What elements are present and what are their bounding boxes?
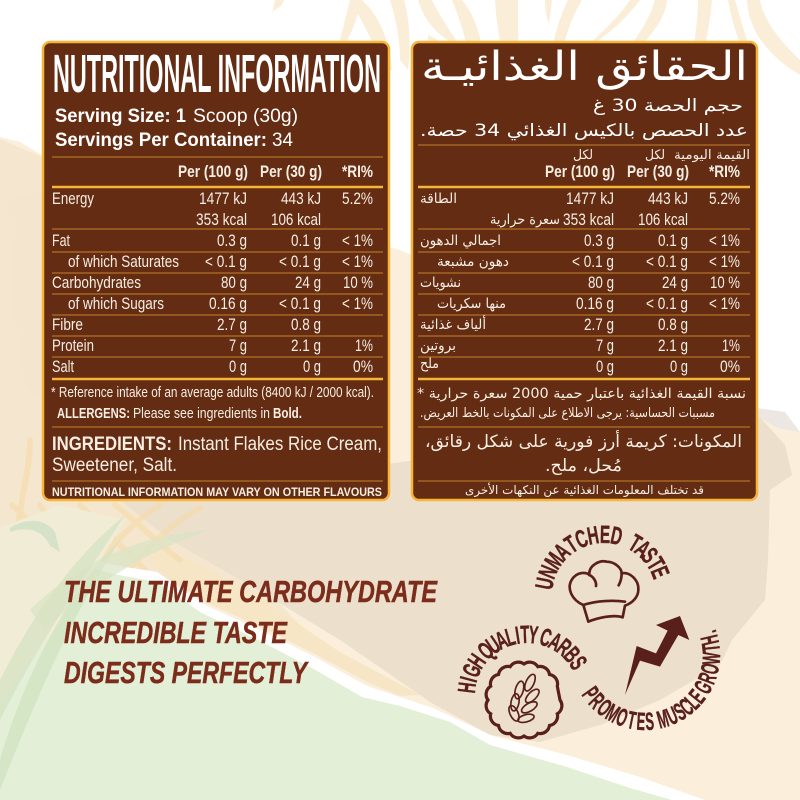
arabic row labels: بروتين (420, 338, 456, 354)
arabic serving size (420, 96, 748, 141)
promotes muscle growth curved label: S (669, 698, 691, 727)
table rows: 2.1 g (291, 336, 321, 355)
high quality carbs curved label: H (454, 681, 482, 695)
arabic serving size: حجم الحصة 30 غ (593, 96, 743, 116)
unmatched taste curved label: M (540, 548, 570, 574)
arabic ingredients (425, 430, 742, 476)
badge: unmatched taste (531, 521, 674, 622)
serving size: 34 (272, 130, 293, 151)
ingredients: INGREDIENTS: (52, 434, 172, 455)
promotes muscle growth curved label: . (695, 627, 722, 639)
left wood streak (8, 190, 42, 400)
table rows: of which Saturates (68, 252, 179, 271)
arabic row labels: الطاقة (420, 191, 457, 207)
table header: Per (100 g) (545, 162, 615, 181)
wood brush strokes (120, 414, 792, 742)
arabic row labels: سعرة حرارية (490, 212, 560, 228)
slogans: DIGESTS PERFECTLY (64, 655, 309, 690)
arabic footer note: قد تختلف المعلومات الغذائية عن النكهات الأخرى (465, 482, 704, 498)
text: NUTRITIONAL INFORMATION (53, 44, 381, 104)
table rows: 0.3 g (217, 231, 247, 250)
table rows values: 0 g (596, 357, 614, 376)
table header: *RI% (342, 162, 373, 181)
table header: *RI% (709, 162, 740, 181)
high quality carbs curved label: I (456, 674, 483, 685)
table rows: 106 kcal (271, 210, 321, 229)
grey tear shadow (757, 408, 800, 432)
table rows: 5.2% (342, 189, 373, 208)
table rows values: 10 % (710, 273, 740, 292)
table rows values: 24 g (662, 273, 688, 292)
table rows values: 1% (722, 336, 740, 355)
promotes muscle growth curved label: O (612, 704, 631, 733)
white tear band (0, 536, 705, 800)
table header: لكل (645, 148, 665, 163)
table rows values: 443 kJ (648, 189, 688, 208)
badge: promotes muscle growth (576, 616, 726, 736)
promotes muscle growth curved label: T (625, 707, 638, 735)
ingredients: Sweetener, Salt. (52, 455, 177, 476)
arabic ingredients: مُحل، ملح. (545, 456, 622, 476)
table rows values: 0.16 g (576, 294, 614, 313)
icon: chef hat (570, 561, 638, 622)
slogans (64, 574, 438, 690)
high quality carbs curved label: L (503, 624, 519, 652)
high quality carbs curved label: S (563, 652, 591, 675)
unmatched taste curved label: E (600, 521, 611, 549)
table rows: 2.7 g (217, 315, 247, 334)
high quality carbs curved label: G (458, 660, 487, 681)
unmatched taste curved label: A (629, 535, 656, 563)
arabic serving size: عدد الحصص بالكيس الغذائي 34 حصة. (420, 121, 748, 141)
high quality carbs curved label: Q (473, 638, 500, 665)
unmatched taste curved label: N (534, 562, 564, 583)
promotes muscle growth curved label: C (675, 694, 699, 722)
table rows values: < 0.1 g (572, 252, 614, 271)
badge: high quality carbs (454, 622, 591, 738)
table rows values: 7 g (596, 336, 614, 355)
table rows: 7 g (229, 336, 247, 355)
table rows values: 1477 kJ (566, 189, 614, 208)
unmatched taste curved label: A (549, 538, 576, 566)
table header (545, 148, 750, 181)
table rows values: 5.2% (709, 189, 740, 208)
table rows values: < 1% (709, 231, 740, 250)
table rows: Energy (52, 189, 94, 208)
table rows: 353 kcal (196, 210, 247, 229)
promotes muscle growth curved label: H (696, 632, 725, 648)
high quality carbs curved label: Y (527, 622, 540, 650)
unmatched taste curved label: T (641, 553, 670, 576)
promotes muscle growth curved label: G (689, 677, 719, 699)
allergens (57, 405, 302, 422)
arabic row labels: نشويات (420, 275, 461, 291)
arabic title: الحقائق الغذائيـة (421, 44, 748, 90)
slogans: THE ULTIMATE CARBOHYDRATE (64, 574, 438, 609)
table rows: 0.8 g (291, 315, 321, 334)
icon: wheat (507, 673, 541, 724)
rice stalks orange (12, 440, 200, 640)
high quality carbs curved label: T (520, 622, 530, 649)
high quality carbs curved label: R (551, 634, 576, 662)
promotes muscle growth curved label: P (576, 682, 604, 705)
allergens: ALLERGENS: (57, 405, 130, 422)
table header: Per (30 g) (260, 162, 322, 181)
table rows values (563, 189, 740, 376)
arabic row labels: اجمالي الدهون (420, 233, 501, 249)
high quality carbs curved label: A (544, 628, 566, 657)
promotes muscle growth curved label: S (644, 708, 655, 736)
unmatched taste curved label: C (571, 525, 592, 554)
table header: لكل (573, 148, 593, 163)
footer note: NUTRITIONAL INFORMATION MAY VARY ON OTHER FLAVOURS (52, 487, 382, 499)
unmatched taste curved label: U (531, 575, 560, 592)
high quality carbs curved label (454, 622, 591, 695)
ingredients (52, 434, 382, 476)
icon: scalloped ring (486, 662, 562, 738)
panel: nutritional information arabic (412, 42, 757, 500)
unmatched taste curved label: T (560, 531, 583, 559)
table rows: < 1% (342, 252, 373, 271)
table rows: of which Sugars (68, 294, 164, 313)
high quality carbs curved label: C (536, 624, 555, 653)
unmatched taste curved label (531, 521, 674, 592)
unmatched taste curved label: H (585, 522, 601, 551)
table rules (52, 157, 383, 481)
table rows: < 1% (342, 294, 373, 313)
promotes muscle growth curved label: O (696, 661, 726, 677)
green area (0, 528, 672, 800)
arabic row labels: دهون مشبعة (437, 254, 509, 270)
table rows: 1% (355, 336, 373, 355)
arabic allergens: مسببات الحساسية: يرجى الاطلاع على المكونات بالخط العريض. (420, 406, 715, 421)
top rice leaves (272, 0, 800, 75)
ingredients: Instant Flakes Rice Cream, (178, 434, 382, 455)
table rows values: 0.8 g (658, 315, 688, 334)
high quality carbs curved label: H (464, 650, 492, 674)
table rows: 10 % (343, 273, 373, 292)
unmatched taste curved label: T (624, 529, 646, 558)
table rows values: < 0.1 g (646, 252, 688, 271)
table rows values: < 0.1 g (646, 294, 688, 313)
unmatched taste curved label: E (645, 563, 674, 583)
panel: nutritional information english (43, 42, 389, 500)
table rows: < 0.1 g (279, 252, 321, 271)
table header: القيمة اليومية (674, 148, 750, 163)
table rows: < 0.1 g (205, 252, 247, 271)
table rows: 0.1 g (291, 231, 321, 250)
table rows: Carbohydrates (52, 273, 141, 292)
promotes muscle growth curved label: M (601, 699, 624, 729)
serving size: Servings Per Container: (55, 130, 267, 151)
table rows: 24 g (295, 273, 321, 292)
table rows: Salt (52, 357, 74, 376)
table rows values: 2.1 g (658, 336, 688, 355)
promotes muscle growth curved label: W (698, 652, 726, 665)
table header: Per (30 g) (627, 162, 689, 181)
table rows: Fibre (52, 315, 83, 334)
promotes muscle growth curved label: R (694, 669, 723, 688)
table rows values: 106 kcal (638, 210, 688, 229)
table rows: 0 g (303, 357, 321, 376)
arabic ingredients: المكونات: كريمة أرز فورية على شكل رقائق، (425, 430, 742, 452)
table rows: 1477 kJ (199, 189, 247, 208)
table rows: < 1% (342, 231, 373, 250)
serving size: Serving Size: 1 (55, 106, 186, 127)
table rows: Fat (52, 231, 70, 250)
arabic row labels (420, 191, 560, 372)
promotes muscle growth curved label: E (636, 708, 646, 736)
table rows: 80 g (221, 273, 247, 292)
table rows: < 0.1 g (279, 294, 321, 313)
table rows values: 80 g (588, 273, 614, 292)
promotes muscle growth curved label: T (698, 643, 726, 653)
slogans: INCREDIBLE TASTE (64, 615, 288, 650)
table rows: 0% (353, 357, 373, 376)
table rows values: 0.1 g (658, 231, 688, 250)
serving size (55, 106, 298, 151)
table rows values: 353 kcal (563, 210, 614, 229)
table rules (418, 145, 750, 481)
table rows: 0 g (229, 357, 247, 376)
promotes muscle growth curved label: L (680, 690, 705, 715)
panel background (412, 42, 757, 500)
yellow tear fringe (140, 545, 420, 696)
table rows (52, 189, 373, 376)
promotes muscle growth curved label: U (663, 702, 682, 731)
promotes muscle growth curved label: M (654, 705, 672, 735)
table rows values: 0% (720, 357, 740, 376)
table header (178, 162, 373, 181)
table rows values: < 1% (709, 252, 740, 271)
high quality carbs curved label: A (491, 627, 513, 656)
table rows: 0.16 g (209, 294, 247, 313)
allergens: Please see ingredients in (133, 405, 270, 422)
green rice leaves (0, 505, 210, 790)
panel background (43, 42, 389, 500)
unmatched taste curved label: S (635, 543, 663, 569)
table rows values: 0.3 g (584, 231, 614, 250)
left beige area (0, 139, 300, 625)
table header: Per (100 g) (178, 162, 248, 181)
high quality carbs curved label: I (514, 623, 522, 650)
table rows values: < 1% (709, 294, 740, 313)
table rows values: 0 g (670, 357, 688, 376)
high quality carbs curved label: B (558, 642, 585, 668)
table rows: Protein (52, 336, 94, 355)
footnote reference intake: * Reference intake of an average adults (8400 kJ / 2000 kcal). (51, 385, 374, 401)
promotes muscle growth curved label (576, 627, 726, 736)
high quality carbs curved label: U (482, 632, 506, 660)
promotes muscle growth curved label: R (583, 689, 609, 715)
table rows values: 2.7 g (584, 315, 614, 334)
serving size: Scoop (30g) (193, 106, 298, 127)
promotes muscle growth curved label: O (591, 694, 616, 722)
promotes muscle growth curved label: E (684, 685, 711, 709)
arabic row labels: ألياف غذائية (420, 315, 486, 333)
arabic footnote: نسبة القيمة الغذائية باعتبار حمية 2000 سعرة حرارية * (417, 386, 746, 402)
table rows: 443 kJ (281, 189, 321, 208)
arabic row labels: منها سكريات (437, 296, 506, 312)
icon: lightning arrow (625, 616, 689, 695)
unmatched taste curved label: D (608, 522, 625, 551)
allergens: Bold. (273, 405, 302, 422)
arabic row labels: ملح (420, 356, 439, 372)
